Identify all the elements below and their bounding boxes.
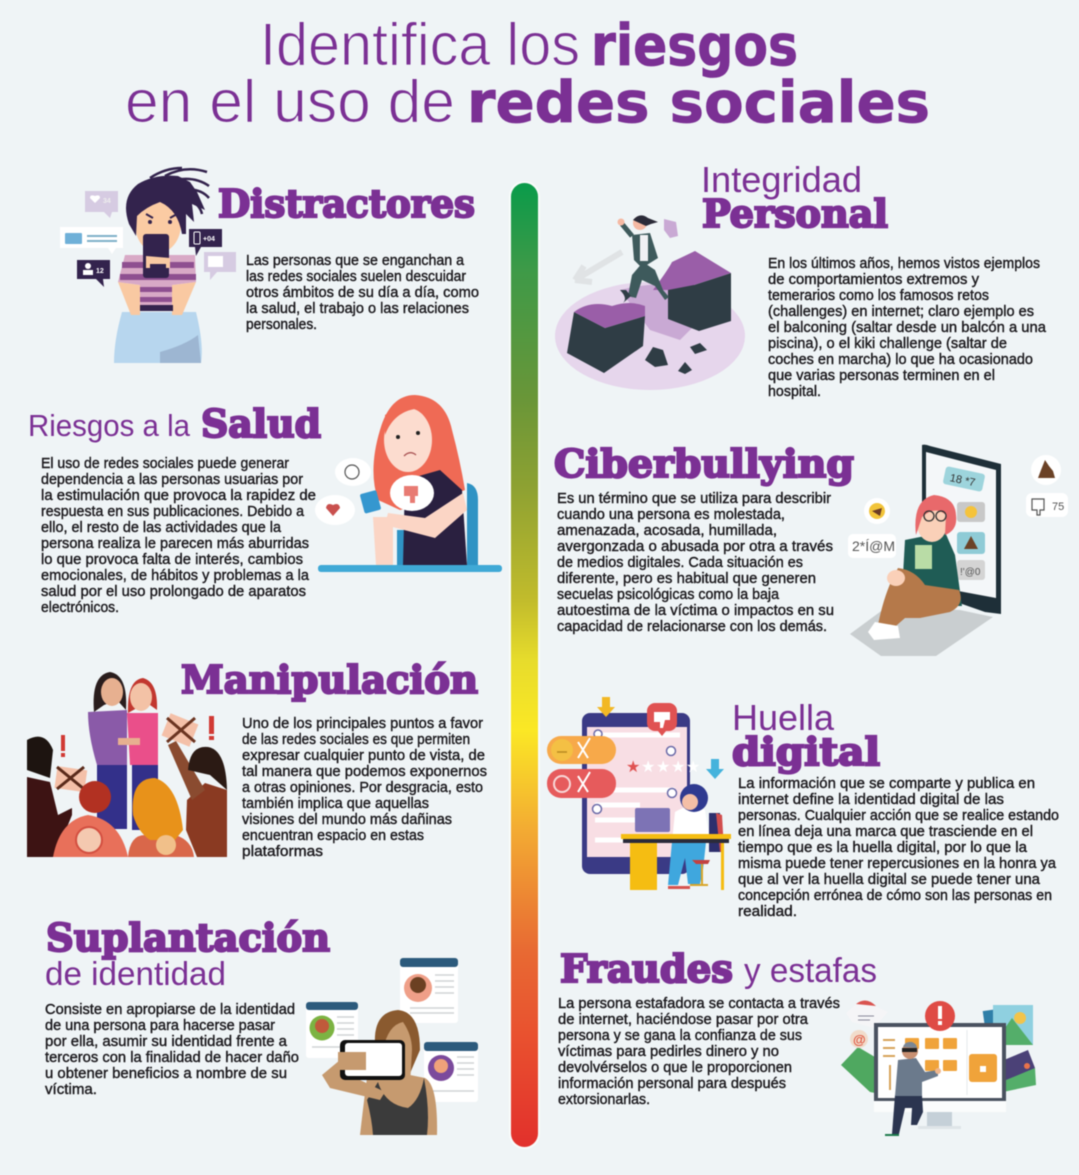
text: Fraudes y estafas: La persona estafadora se contacta a través (558, 996, 840, 1012)
heading: Riesgos a la Salud: Salud (201, 401, 321, 446)
heading: Manipulación: Manipulación (181, 657, 478, 702)
text: Huella digital: realidad. (738, 904, 797, 920)
text: Ciberbullying: Es un término que se utiliza para describir (557, 491, 831, 507)
text: Integridad Personal: que varias personas terminen en el (768, 368, 995, 384)
figure: left protester (27, 735, 87, 857)
text: Suplantación de identidad: por ella, asumir su identidad frente a (45, 1034, 288, 1050)
bubble: mail (60, 227, 123, 254)
text: Integridad Personal: el balconing (saltar desde un balcón a una (768, 320, 1047, 336)
illustration: seated person and phone (848, 445, 1068, 656)
text: Riesgos a la Salud: emocionales, de hábitos y problemas a la (41, 568, 310, 584)
icon: at sign: @ (853, 1032, 866, 1047)
bubble: likes (85, 191, 118, 218)
bubble: followers: 12 (96, 268, 104, 275)
heading: Huella digital: Huella (732, 697, 835, 738)
text: Suplantación de identidad (45, 1002, 299, 1098)
text: Huella digital: internet define la identidad digital de las (738, 792, 1004, 808)
panel: Riesgos a la Salud (28, 395, 502, 616)
rating stars: ★ (626, 759, 640, 776)
heading: Fraudes y estafas: y estafas (744, 952, 877, 990)
card: top profile (400, 958, 458, 1023)
icon: yellow arrow (597, 697, 615, 717)
text: Fraudes y estafas: víctimas para pedirles dinero y no (558, 1044, 779, 1060)
text: Ciberbullying: diferente, pero es habitual que generen (557, 571, 816, 587)
illustration: tablet, ratings and person at desk (547, 697, 731, 890)
bubble: laughing emoji (864, 498, 890, 524)
icon: at sign (850, 1030, 868, 1048)
title (125, 11, 930, 136)
text: Integridad Personal: En los últimos años, hemos vistos ejemplos (768, 256, 1040, 272)
folders (905, 1038, 997, 1082)
illustration: woman jumping between rocks (555, 215, 745, 390)
title: Identifica los (260, 11, 580, 78)
text: Fraudes y estafas: de internet, haciéndose pasar por otra (558, 1012, 809, 1028)
figure: red-haired protester (53, 781, 128, 857)
text: Huella digital: misma puede tener repercusiones en la honra ya (738, 856, 1057, 872)
figure: thief (885, 1042, 941, 1136)
text: Ciberbullying: cuando una persona es molestada, (557, 507, 785, 523)
rating stars: ★ (686, 759, 700, 776)
text: Huella digital: que al ver la huella digital se puede tener una (738, 872, 1041, 888)
icon: credit cards (1000, 1050, 1036, 1092)
illustration: protesters and couple (27, 672, 227, 857)
text: Distractores: la salud, el trabajo o las relaciones (246, 301, 469, 317)
card: right profile (424, 1042, 478, 1102)
illustration: seated person and phone: !'@0 (960, 567, 981, 578)
text: Fraudes y estafas: persona y se gana la confianza de sus (558, 1028, 802, 1044)
heading: Ciberbullying: Ciberbullying (554, 441, 854, 486)
icon: alert (925, 1001, 955, 1031)
icon: blue arrow (706, 759, 724, 779)
rating stars: ★ (656, 759, 670, 776)
heading: Suplantación de identidad: de identidad (45, 955, 226, 992)
rating stars (626, 759, 700, 776)
text: Manipulación: tal manera que podemos exponernos (242, 764, 487, 780)
text: Manipulación: encuentran espacio en estas (242, 828, 424, 844)
heading: Suplantación de identidad: Suplantación (46, 915, 330, 960)
text: Huella digital: personas. Cualquier acción que se realice estando (738, 808, 1059, 824)
heading: Riesgos a la Salud: Riesgos a la (28, 408, 191, 443)
risk gradient bar (509, 181, 540, 1149)
bubble: phone count: +04 (203, 236, 215, 243)
bubble: dislike count (1026, 493, 1068, 517)
bubble: phone count (189, 229, 222, 256)
icon: sad rating pill (547, 769, 616, 798)
text: Suplantación de identidad: u obtener beneficios a nombre de su (45, 1066, 287, 1082)
panel: Manipulación (27, 657, 487, 860)
text: Riesgos a la Salud: la estimulación que provoca la rapidez de (41, 488, 316, 504)
rating stars: ★ (641, 759, 655, 776)
bubble: broken heart (315, 495, 355, 525)
text: Integridad Personal (768, 256, 1047, 400)
figure: blonde protester (128, 778, 194, 857)
heading: Huella digital (732, 697, 880, 774)
text: Riesgos a la Salud: ello, el resto de las actividades que la (41, 520, 282, 536)
icon: dislike bubble (647, 703, 677, 736)
text: Fraudes y estafas: extorsionarlas. (558, 1092, 650, 1108)
text: Suplantación de identidad: víctima. (45, 1082, 97, 1098)
text: Riesgos a la Salud: electrónicos. (41, 600, 119, 616)
bubble: likes: 34 (103, 198, 111, 205)
text: Manipulación: Uno de los principales puntos a favor (242, 716, 483, 732)
card: left profile (306, 1002, 358, 1058)
title: riesgos (591, 13, 798, 79)
text: Distractores: Las personas que se enganchan a (246, 253, 465, 269)
bubble: symbols (848, 534, 896, 558)
illustration: sad woman with phone (315, 395, 502, 572)
text: Manipulación: de las redes sociales es que permiten (242, 732, 470, 748)
illustration: thief at computer (841, 1000, 1036, 1136)
text: Fraudes y estafas: información personal para después (558, 1076, 786, 1092)
text: Integridad Personal: de comportamientos extremos y (768, 272, 980, 288)
title: redes sociales (467, 70, 930, 136)
text: Integridad Personal: (challenges) en internet; claro ejemplo es (768, 304, 1034, 320)
heading: Suplantación de identidad (45, 915, 330, 992)
text: Ciberbullying: autoestima de la víctima o impactos en su (557, 603, 834, 619)
panel: Integridad Personal (555, 159, 1047, 400)
bubble: message (204, 252, 236, 280)
text: Manipulación: visiones del mundo más dañinas (242, 812, 452, 828)
text: Riesgos a la Salud (41, 456, 316, 616)
icon: neutral rating pill (547, 736, 616, 764)
text: Ciberbullying: de medios digitales. Cada situación es (557, 555, 803, 571)
text: Integridad Personal: coches en marcha) lo que ha ocasionado (768, 352, 1033, 368)
text: Suplantación de identidad: Consiste en apropiarse de la identidad (45, 1002, 295, 1018)
bubble: followers (77, 260, 110, 287)
panel: Suplantación de identidad (45, 915, 478, 1135)
text: Fraudes y estafas: devolvérselos o que le proporcionen (558, 1060, 792, 1076)
text: Integridad Personal: temerarios como los famosos retos (768, 288, 989, 304)
panel: Huella digital (547, 697, 1059, 920)
panel: Ciberbullying (554, 441, 1068, 656)
text: Ciberbullying: amenazada, acosada, humillada, (557, 523, 777, 539)
text: Riesgos a la Salud: salud por el uso prolongado de aparatos (41, 584, 306, 600)
text: Huella digital: tiempo que es la huella digital, por lo que la (738, 840, 1028, 856)
text: Manipulación: expresar cualquier punto de vista, de (242, 748, 485, 764)
bubble: sad face (335, 458, 371, 486)
heading: Integridad Personal: Personal (702, 191, 888, 236)
text: Suplantación de identidad: terceros con la finalidad de hacer daño (45, 1050, 299, 1066)
bubble: symbols: 2*Í@M (852, 538, 895, 554)
text: Distractores (246, 253, 479, 333)
heading: Riesgos a la Salud (28, 401, 321, 446)
heading: Distractores: Distractores (218, 181, 475, 226)
text: Ciberbullying: secuelas psicológicas como la baja (557, 587, 780, 603)
text: Ciberbullying (557, 491, 834, 635)
heading: Fraudes y estafas: Fraudes (560, 946, 733, 991)
text: Huella digital (738, 776, 1059, 920)
heading: Integridad Personal: Integridad (701, 159, 862, 200)
figure: raised-arm protester (162, 713, 227, 857)
text: Integridad Personal: hospital. (768, 384, 821, 400)
text: Riesgos a la Salud: dependencia a las personas usuarias por (41, 472, 303, 488)
text: Fraudes y estafas (558, 996, 840, 1108)
title: en el uso de (125, 68, 455, 135)
illustration: girl with phone and notifications (60, 168, 236, 363)
text: Riesgos a la Salud: respuesta en sus publicaciones. Debido a (41, 504, 305, 520)
heading: Huella digital: digital (732, 729, 880, 774)
text: Distractores: otros ámbitos de su día a día, como (246, 285, 479, 301)
illustration: seated person and phone: 18 *7 (949, 472, 976, 489)
text: Manipulación (242, 716, 487, 860)
panel: Distractores (60, 168, 479, 363)
text: Manipulación: a otras opiniones. Por desgracia, esto (242, 780, 483, 796)
text: Huella digital: La información que se comparte y publica en (738, 776, 1035, 792)
illustration: woman taking selfie with profile cards (306, 958, 478, 1135)
text: Riesgos a la Salud: persona realiza le parecen más aburridas (41, 536, 309, 552)
text: Riesgos a la Salud: El uso de redes sociales puede generar (41, 456, 289, 472)
icon: pictures (983, 1005, 1033, 1047)
text: Huella digital: concepción errónea de cómo son las personas en (738, 888, 1052, 904)
bubble: dislike count: 75 (1052, 501, 1064, 513)
text: Integridad Personal: piscina), o el kiki challenge (saltar de (768, 336, 1007, 352)
text: Distractores: personales. (246, 317, 317, 333)
text: Manipulación: también implica que aquellas (242, 796, 429, 812)
text: Distractores: las redes sociales suelen descuidar (246, 269, 466, 285)
text: Riesgos a la Salud: lo que provoca falta de interés, cambios (41, 552, 303, 568)
icon: envelope (846, 1000, 888, 1028)
icon: money (841, 1047, 880, 1094)
heading: Integridad Personal (701, 159, 888, 236)
text: Ciberbullying: avergonzada o abusada por otra a través (557, 539, 833, 555)
rating stars: ★ (671, 759, 685, 776)
heading: Fraudes y estafas (560, 946, 877, 991)
bubble: dislike (390, 475, 434, 511)
text: Suplantación de identidad: de una persona para hacerse pasar (45, 1018, 275, 1034)
text: Huella digital: en línea deja una marca que trasciende en el (738, 824, 1033, 840)
text: Ciberbullying: capacidad de relacionarse con los demás. (557, 619, 827, 635)
bubble: poop emoji (1031, 455, 1061, 485)
panel: Fraudes y estafas (558, 946, 1036, 1136)
text: Manipulación: plataformas (242, 844, 323, 860)
